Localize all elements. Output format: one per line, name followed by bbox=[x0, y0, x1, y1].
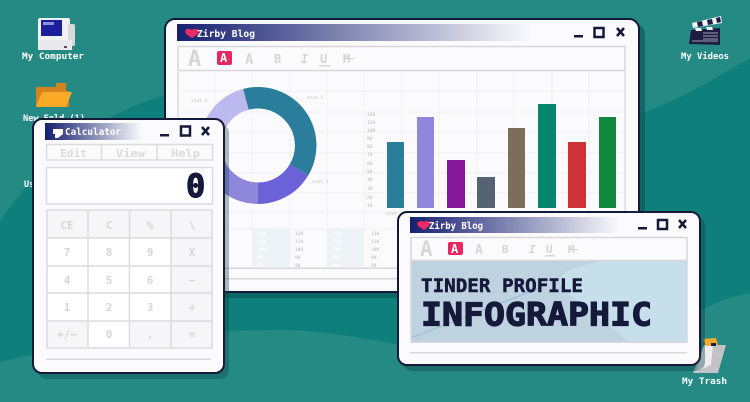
chart labels: stat 1 bbox=[307, 95, 324, 101]
data table: 80 bbox=[333, 263, 339, 269]
bar chart bbox=[387, 104, 616, 208]
y axis numbers: 90 bbox=[367, 136, 373, 142]
panel: calculator window bbox=[33, 119, 224, 373]
heading: Infographic: INFOGRAPHIC bbox=[421, 296, 652, 334]
data table: 110 bbox=[258, 239, 266, 245]
toolbar: M bbox=[568, 243, 575, 256]
label: My Videos: My Videos bbox=[681, 51, 729, 62]
data table: 120 bbox=[258, 231, 266, 237]
icon: folder bbox=[23, 83, 85, 124]
data table: 120 bbox=[333, 231, 341, 237]
title bar bbox=[45, 123, 142, 140]
y axis numbers: 110 bbox=[367, 120, 375, 126]
title text: Zirby Blog bbox=[429, 221, 483, 232]
keypad: 7 bbox=[64, 246, 70, 259]
data table: 110 bbox=[333, 239, 341, 245]
panel: blog window bbox=[398, 212, 700, 365]
toolbar: I bbox=[301, 52, 309, 66]
keypad: 5 bbox=[106, 274, 112, 287]
keypad: 3 bbox=[147, 301, 153, 314]
keypad bbox=[47, 210, 212, 348]
keypad: 0 bbox=[106, 328, 112, 341]
y axis numbers: 70 bbox=[367, 152, 373, 158]
keypad: X bbox=[189, 246, 196, 259]
calculator shadow bbox=[38, 124, 229, 379]
icon: My Trash bbox=[682, 338, 727, 387]
data table: 110 bbox=[295, 239, 303, 245]
panel: main window bbox=[165, 19, 639, 292]
icon: heart bbox=[417, 221, 430, 230]
menu bar bbox=[46, 144, 212, 160]
label: My Computer: My Computer bbox=[22, 52, 84, 62]
data table: 90 bbox=[295, 255, 301, 261]
keypad: 9 bbox=[147, 246, 153, 259]
y axis numbers: 100 bbox=[367, 128, 375, 134]
toolbar: M bbox=[343, 52, 350, 66]
label: New Folder: New Fold (1) bbox=[23, 114, 85, 124]
title bar bbox=[410, 217, 620, 233]
toolbar bbox=[178, 46, 625, 72]
y axis numbers: 50 bbox=[367, 169, 373, 175]
data table bbox=[253, 228, 379, 269]
chart grid bbox=[178, 72, 625, 268]
chart labels: stat bbox=[386, 211, 397, 217]
display bbox=[46, 167, 212, 205]
icon: My Videos bbox=[681, 16, 729, 62]
menu bar: Edit bbox=[60, 147, 87, 160]
keypad: CE bbox=[60, 219, 74, 232]
display: 0 bbox=[186, 167, 205, 205]
y axis numbers: 120 bbox=[367, 112, 375, 118]
data table: 80 bbox=[258, 263, 264, 269]
window controls bbox=[574, 28, 624, 38]
keypad: 1 bbox=[64, 301, 71, 314]
title bar bbox=[177, 24, 533, 41]
toolbar: A bbox=[420, 237, 433, 261]
menu bar: Help bbox=[171, 147, 200, 160]
y axis numbers bbox=[367, 112, 375, 209]
toolbar: A bbox=[188, 47, 201, 72]
keypad: +/− bbox=[57, 328, 77, 341]
y axis numbers: 40 bbox=[367, 177, 373, 183]
label: Users: Users bbox=[24, 180, 50, 190]
icon: heart bbox=[185, 29, 199, 38]
data table: 100 bbox=[258, 247, 266, 253]
keypad: + bbox=[189, 301, 196, 314]
window controls bbox=[160, 126, 209, 136]
donut chart bbox=[200, 87, 316, 204]
icon: My Computer bbox=[22, 18, 84, 62]
heading: Tinder Profile: TINDER PROFILE bbox=[421, 276, 583, 297]
window controls bbox=[638, 220, 686, 230]
chart labels bbox=[191, 95, 397, 217]
data table: 80 bbox=[371, 263, 377, 269]
y axis numbers: 80 bbox=[367, 144, 373, 150]
data table: 90 bbox=[333, 255, 339, 261]
chart labels: stat 2 bbox=[191, 98, 208, 104]
label: My Trash: My Trash bbox=[682, 377, 727, 387]
data table: 80 bbox=[295, 263, 301, 269]
keypad: , bbox=[147, 328, 153, 341]
title text: Calculator bbox=[65, 127, 121, 138]
keypad: = bbox=[189, 328, 196, 341]
toolbar: U bbox=[546, 243, 553, 256]
keypad: 6 bbox=[147, 274, 154, 287]
title text: Zirby Blog bbox=[197, 28, 255, 40]
toolbar: A bbox=[220, 51, 228, 65]
data table: 120 bbox=[371, 231, 379, 237]
keypad: C bbox=[106, 219, 112, 232]
toolbar: I bbox=[529, 243, 536, 256]
y axis numbers: 30 bbox=[367, 186, 373, 192]
banner bbox=[411, 261, 687, 343]
keypad: % bbox=[147, 219, 154, 232]
keypad: 4 bbox=[64, 274, 71, 287]
toolbar: B bbox=[274, 52, 281, 66]
data table: 90 bbox=[258, 255, 264, 261]
icon: calculator badge bbox=[53, 129, 63, 138]
y axis numbers: 10 bbox=[367, 203, 373, 209]
data table: 120 bbox=[295, 231, 303, 237]
keypad: 8 bbox=[106, 246, 112, 259]
data table: 100 bbox=[371, 247, 379, 253]
keypad: 2 bbox=[106, 301, 112, 314]
toolbar: B bbox=[502, 243, 509, 256]
y axis numbers: 20 bbox=[367, 195, 373, 201]
toolbar: U bbox=[320, 52, 327, 66]
chart labels: stat 3 bbox=[312, 179, 329, 185]
y axis numbers: 60 bbox=[367, 161, 373, 167]
keypad: − bbox=[189, 274, 196, 287]
menu bar: View bbox=[116, 147, 145, 160]
data table: 100 bbox=[295, 247, 303, 253]
toolbar: A bbox=[475, 243, 483, 258]
toolbar bbox=[411, 237, 687, 261]
main window shadow bbox=[170, 24, 645, 298]
toolbar: A bbox=[245, 52, 254, 68]
keypad: \ bbox=[189, 219, 196, 232]
data table: 90 bbox=[371, 255, 377, 261]
data table: 110 bbox=[371, 239, 379, 245]
blog window shadow bbox=[403, 217, 705, 371]
data table: 100 bbox=[333, 247, 341, 253]
toolbar: A bbox=[451, 242, 459, 256]
